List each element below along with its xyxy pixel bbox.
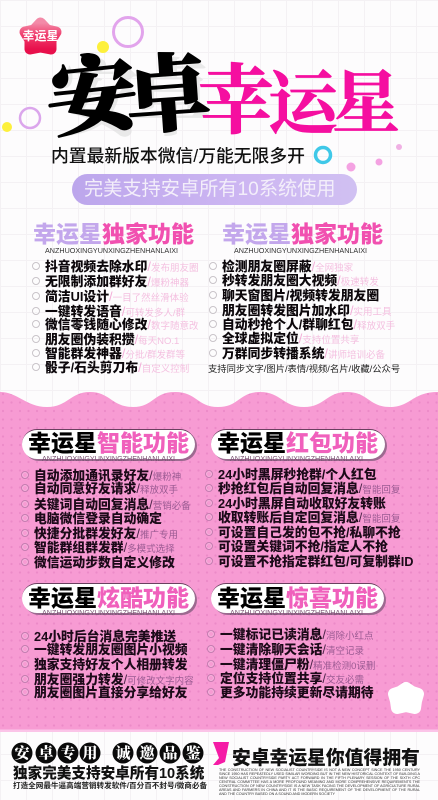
feature list: 微信零钱随心修改/数字随意改 xyxy=(45,317,198,332)
footer: right slogan block xyxy=(213,742,420,796)
black seal badges: 鉴 xyxy=(185,742,201,763)
feature list: 骰子/石头剪刀布/自定义控制 xyxy=(45,360,189,375)
title: 安卓幸运星: 运 xyxy=(268,48,342,149)
heading: 幸运星独家功能 xyxy=(222,221,383,247)
feature list xyxy=(21,629,194,700)
black seal badges: 邀 xyxy=(139,742,155,763)
pinyin caption: ANZHUOXINGYUNXINGZHENHANLAIXI xyxy=(230,608,363,617)
feature list: 聊天窗图片/视频转发朋友圈 xyxy=(222,288,379,303)
heading: 幸运星独家功能 xyxy=(33,221,194,247)
feature list: 检测朋友圈屏蔽/全网独家 xyxy=(222,259,353,274)
footer: left slogan block xyxy=(12,742,207,790)
logo: pink star badge: 幸运星 xyxy=(22,28,59,43)
decorative circles and dots xyxy=(2,16,402,172)
icon: white star blob xyxy=(388,682,424,714)
heading pill xyxy=(211,583,384,613)
feature list xyxy=(207,627,375,700)
banner pill: 完美支持安卓所有10系统使用 xyxy=(84,179,336,200)
sub slogan: 打造全网最牛逼高端营销转发软件/百分百不封号/微商必备 xyxy=(13,781,207,790)
feature list: 万群同步转播系统/讲师培训必备 xyxy=(222,346,385,361)
pink wavy background panel xyxy=(0,392,438,732)
black seal badges: 专 xyxy=(60,742,76,763)
feature list: 一键清理僵尸粉/精准检测0误删 xyxy=(220,657,375,672)
panel: surprise features xyxy=(207,583,386,700)
feature list: 智能群发神器/分批/群发群等 xyxy=(45,346,185,361)
icon: pink slash mark xyxy=(213,742,229,765)
feature list: 一键标记已读消息/消除小红点 xyxy=(220,627,373,642)
feature list: 全球虚拟定位/支持位置共享 xyxy=(222,331,359,346)
feature list: 可设置自己发的包不抢/私聊不抢 xyxy=(218,525,401,540)
feature list: 24小时后台消息完美推送 xyxy=(34,629,176,644)
feature list: 电脑微信登录自动确定 xyxy=(34,511,162,526)
feature list: 朋友圈转发图片加水印/实用工具 xyxy=(222,303,392,318)
pinyin caption: ANZHUOXINGYUNXINGZHENHANLAIXI xyxy=(234,246,367,255)
title: 安卓幸运星 xyxy=(45,40,400,150)
black seal badges: 卓 xyxy=(38,742,54,763)
feature list: 24小时黑屏秒抢群/个人红包 xyxy=(218,467,377,482)
slogan: 独家完美支持安卓所有10系统 xyxy=(13,766,204,782)
feature list: 微信运动步数自定义修改 xyxy=(34,555,175,570)
feature list: 可设置不抢指定群红包/可复制群ID xyxy=(218,554,414,569)
feature list: 朋友圈强力转发/可修改文字内容 xyxy=(34,672,194,687)
black seal badges: 安 xyxy=(14,742,30,763)
heading pill xyxy=(22,429,195,459)
panel: cool features xyxy=(21,583,197,700)
feature list: 一键清除聊天会话/清空记录 xyxy=(220,642,364,657)
sync note: 支持同步文字/图片/表情/视频/名片/收藏/公众号 xyxy=(208,364,400,374)
feature list: 秒转发朋友圈大视频/极速转发 xyxy=(222,273,379,288)
feature list xyxy=(32,259,198,375)
panel: red packet features xyxy=(205,429,414,569)
feature list: 关键词自动回复消息/营销必备 xyxy=(34,497,191,512)
feature list xyxy=(205,467,414,569)
feature list: 一键转发语音/可转发多人/群 xyxy=(45,304,185,319)
black seal badges: 品 xyxy=(162,742,178,763)
feature list: 自动同意好友请求/释放双手 xyxy=(34,481,178,496)
feature list: 智能群组群发群/多模式选择 xyxy=(34,540,175,555)
panel: exclusive features left xyxy=(32,221,198,375)
feature list xyxy=(21,468,191,570)
feature list: 抖音视频去除水印/发布朋友圈 xyxy=(45,259,198,274)
feature list xyxy=(209,259,395,361)
heading: 幸运星红包功能 xyxy=(217,430,378,456)
headline: 安卓幸运星你值得拥有 xyxy=(232,747,420,768)
black seal badges: 用 xyxy=(82,742,98,763)
panel: exclusive features right xyxy=(208,221,400,374)
feature list: 快捷分批群发好友/推广专用 xyxy=(34,526,178,541)
feature list: 无限制添加群好友/爆粉神器 xyxy=(45,274,189,289)
feature list: 24小时黑屏自动收取好友转账 xyxy=(218,496,386,511)
title: 安卓幸运星: 星 xyxy=(332,50,400,147)
black seal badges xyxy=(12,742,204,764)
feature list: 简洁UI设计/一目了然丝滑体验 xyxy=(45,289,189,304)
pinyin caption: ANZHUOXINGYUNXINGZHENHANLAIXI xyxy=(45,246,178,255)
title: 安卓幸运星: 幸 xyxy=(198,40,274,149)
pinyin caption: ANZHUOXINGYUNXINGZHENHANLAIXI xyxy=(42,608,175,617)
heading: 幸运星炫酷功能 xyxy=(28,585,189,611)
feature list: 朋友圈图片直接分享给好友 xyxy=(34,685,188,700)
heading pill xyxy=(22,583,195,613)
feature list: 自动添加通讯录好友/爆粉神 xyxy=(34,468,181,483)
pinyin caption: ANZHUOXINGYUNXINGZHENHANLAIXI xyxy=(42,454,175,463)
feature list: 更多功能持续更新尽请期待 xyxy=(220,685,374,700)
feature list: 收取转账后自定回复消息/智能回复 xyxy=(218,510,400,525)
pinyin caption: ANZHUOXINGYUNXINGZHENHANLAIXI xyxy=(230,454,363,463)
fine print: THE CONSTRUCTION OF NEW SOCIALIST COUNTRYSIDE IS NOT A NEW CONCEPT SINCE THE 1950 CENTURY SINCE 1950 HAS REPEATEDLY USED SIMILAR WORDING BUT IN THE NEW HISTORICAL CONTEXT OF BUILDING A NEW SOCIALIST COUNTRYSIDE PARTY ACT FORWARD IN THE FIFTH PLENARY SESSION OF THE SIXTH CPC CENTRAL COMMITTEE HAS A MORE PROFOUND MEANING AND MORE COMPREHENSIVE REQUIREMENTS THE CONSTRUCTION OF NEW COUNTRYSIDE IS A NEW TASK FACING THE DEVELOPMENT OF AGRICULTURE RURAL AREAS AND FARMERS IN CHINA AND IT IS THE BASIC REQUIREMENT OF THE DEVELOPMENT OF THE RURAL AND THE COUNTRY BASED ON A SOUND AND MODERN SOCIETY xyxy=(219,768,420,796)
feature list: 定位支持位置共享/交友必需 xyxy=(220,671,364,686)
heading pill xyxy=(211,429,385,459)
heading: 幸运星智能功能 xyxy=(28,430,189,456)
feature list: 秒抢红包后自动回复消息/智能回复 xyxy=(218,481,400,496)
subtitle: 内置最新版本微信/万能无限多开 xyxy=(51,146,305,166)
logo: pink star badge xyxy=(20,18,62,54)
banner pill xyxy=(72,174,357,205)
feature list: 一键转发朋友圈图片小视频 xyxy=(34,642,188,657)
panel: smart features xyxy=(21,429,197,570)
black seal badges: 诚 xyxy=(115,742,131,763)
feature list: 朋友圈伪装积攒/每天NO.1 xyxy=(45,332,179,347)
heading: 幸运星惊喜功能 xyxy=(217,585,378,611)
feature list: 可设置关键词不抢/指定人不抢 xyxy=(218,539,388,554)
feature list: 独家支持好友个人相册转发 xyxy=(34,657,188,672)
feature list: 自动秒抢个人/群聊红包/释放双手 xyxy=(222,317,395,332)
